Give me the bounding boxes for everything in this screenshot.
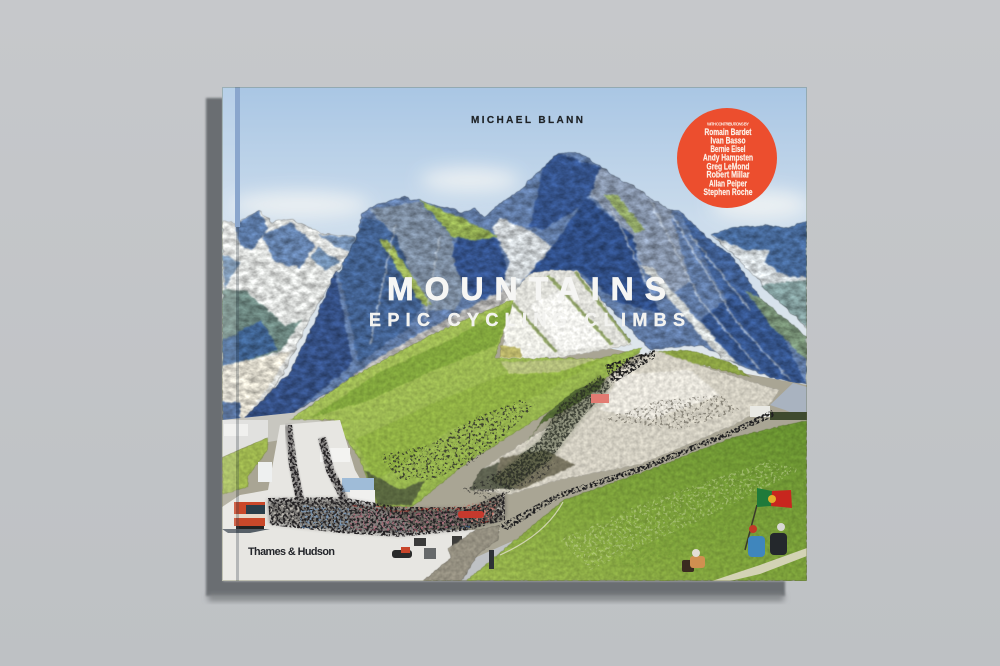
foreground green hillside	[465, 420, 807, 581]
green alpine slope	[289, 298, 643, 507]
red contributors badge: Allan Peiper	[709, 178, 747, 189]
mid-ground underlay	[222, 330, 807, 560]
big dark face	[530, 197, 660, 313]
walking spectator	[489, 550, 494, 569]
red contributors badge: Ivan Basso	[710, 134, 746, 145]
red contributors badge: Romain Bardet	[704, 126, 752, 137]
clouds	[230, 168, 810, 220]
pale spine	[640, 265, 737, 363]
left green patch	[222, 437, 268, 495]
red contributors badge	[677, 108, 777, 208]
publisher name: Thames & Hudson	[248, 546, 335, 558]
pale gully between summits	[492, 218, 552, 292]
hut building at right edge	[750, 383, 807, 420]
pale road verge below the left mountain	[222, 412, 322, 446]
main title: MOUNTAINS	[387, 271, 666, 307]
grass flecks	[608, 468, 807, 569]
rock striations	[370, 200, 790, 380]
red contributors badge: Robert Millar	[706, 169, 750, 180]
dark right of west summit	[451, 236, 508, 300]
far right mountains	[710, 220, 807, 330]
rocky limestone hill	[470, 350, 780, 495]
red contributors badge: Bernie Eisel	[710, 143, 746, 154]
parked vehicles along road	[222, 424, 375, 533]
white road and tarmac	[222, 420, 500, 581]
upper dark face of main peak	[530, 153, 600, 230]
Portuguese flag on hillside	[745, 488, 792, 550]
red contributors badge: WITH CONTRIBUTIONS BY	[707, 122, 749, 126]
spine hinge groove	[222, 87, 240, 581]
spectator crowds	[268, 350, 775, 537]
rocky verge bottom centre	[422, 525, 500, 581]
sky	[222, 87, 807, 387]
book cover photograph scene	[204, 87, 807, 604]
grey gravel road along base	[302, 284, 516, 413]
ridge-right blue faces	[680, 213, 762, 312]
red contributors badge: Greg LeMond	[706, 160, 750, 171]
small banner on rocky hill	[591, 394, 609, 403]
seated spectators	[682, 523, 807, 581]
book cover	[222, 87, 810, 581]
grass on summit	[419, 200, 499, 240]
mountain base silhouette	[239, 152, 807, 423]
lit ridge	[590, 167, 690, 300]
main massif	[239, 152, 807, 423]
cover edge line	[222, 88, 806, 580]
cars and motorbikes on road	[392, 511, 484, 559]
green gully	[379, 240, 432, 305]
footpath on hillside	[500, 502, 563, 555]
lit grey face	[370, 202, 470, 310]
red contributors badge: Stephen Roche	[704, 186, 752, 197]
centre blue face	[339, 217, 422, 363]
subtitle: EPIC CYCLING CLIMBS	[369, 310, 685, 330]
author name: MICHAEL BLANN	[471, 115, 583, 126]
central scree ridge	[500, 270, 632, 367]
book drop shadow	[206, 98, 785, 601]
red contributors badge: Andy Hampsten	[703, 151, 753, 162]
far left mountains	[222, 210, 355, 425]
lower-left shadow face	[239, 272, 352, 423]
